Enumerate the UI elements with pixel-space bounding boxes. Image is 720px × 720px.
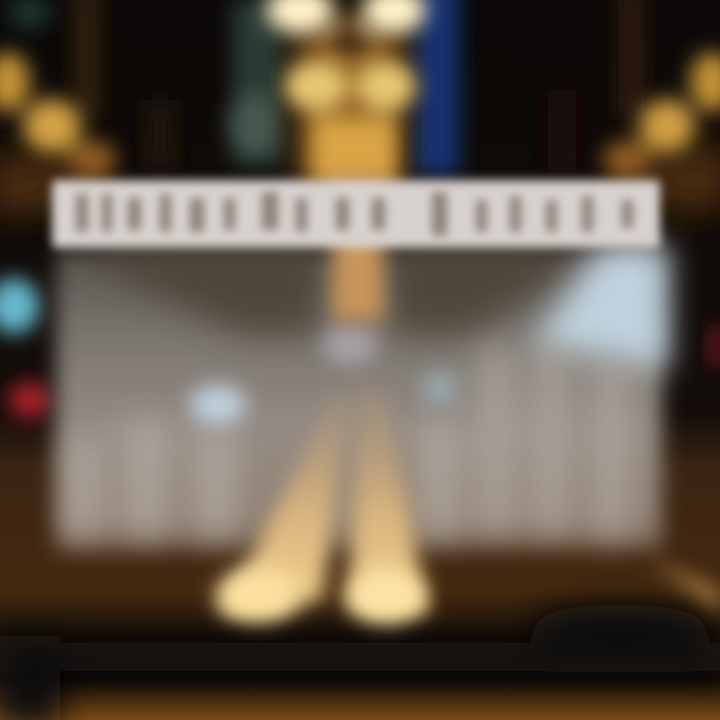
right side street light (709, 322, 720, 370)
background: upper building columns (8, 0, 644, 175)
title banner (52, 180, 660, 248)
panel: pale column highlights (66, 345, 627, 540)
central vertical light pillar (332, 175, 384, 320)
central golden light tower (266, 0, 426, 185)
panel: upper dark diagonal bands (70, 250, 590, 335)
converging road light beams (216, 390, 428, 626)
main content panel (56, 245, 668, 550)
foreground dark silhouette (0, 605, 720, 720)
right string of globe lights (603, 52, 720, 215)
panel: bright upper right wash (530, 245, 668, 370)
left string of globe lights (0, 52, 116, 215)
right beam bright head (348, 570, 424, 626)
left beam bright head (216, 568, 300, 624)
left side street lights (0, 278, 52, 418)
panel: blue-white glow spots (190, 325, 458, 425)
title: blurred letter shapes (76, 192, 633, 236)
right road reflection (650, 560, 720, 615)
